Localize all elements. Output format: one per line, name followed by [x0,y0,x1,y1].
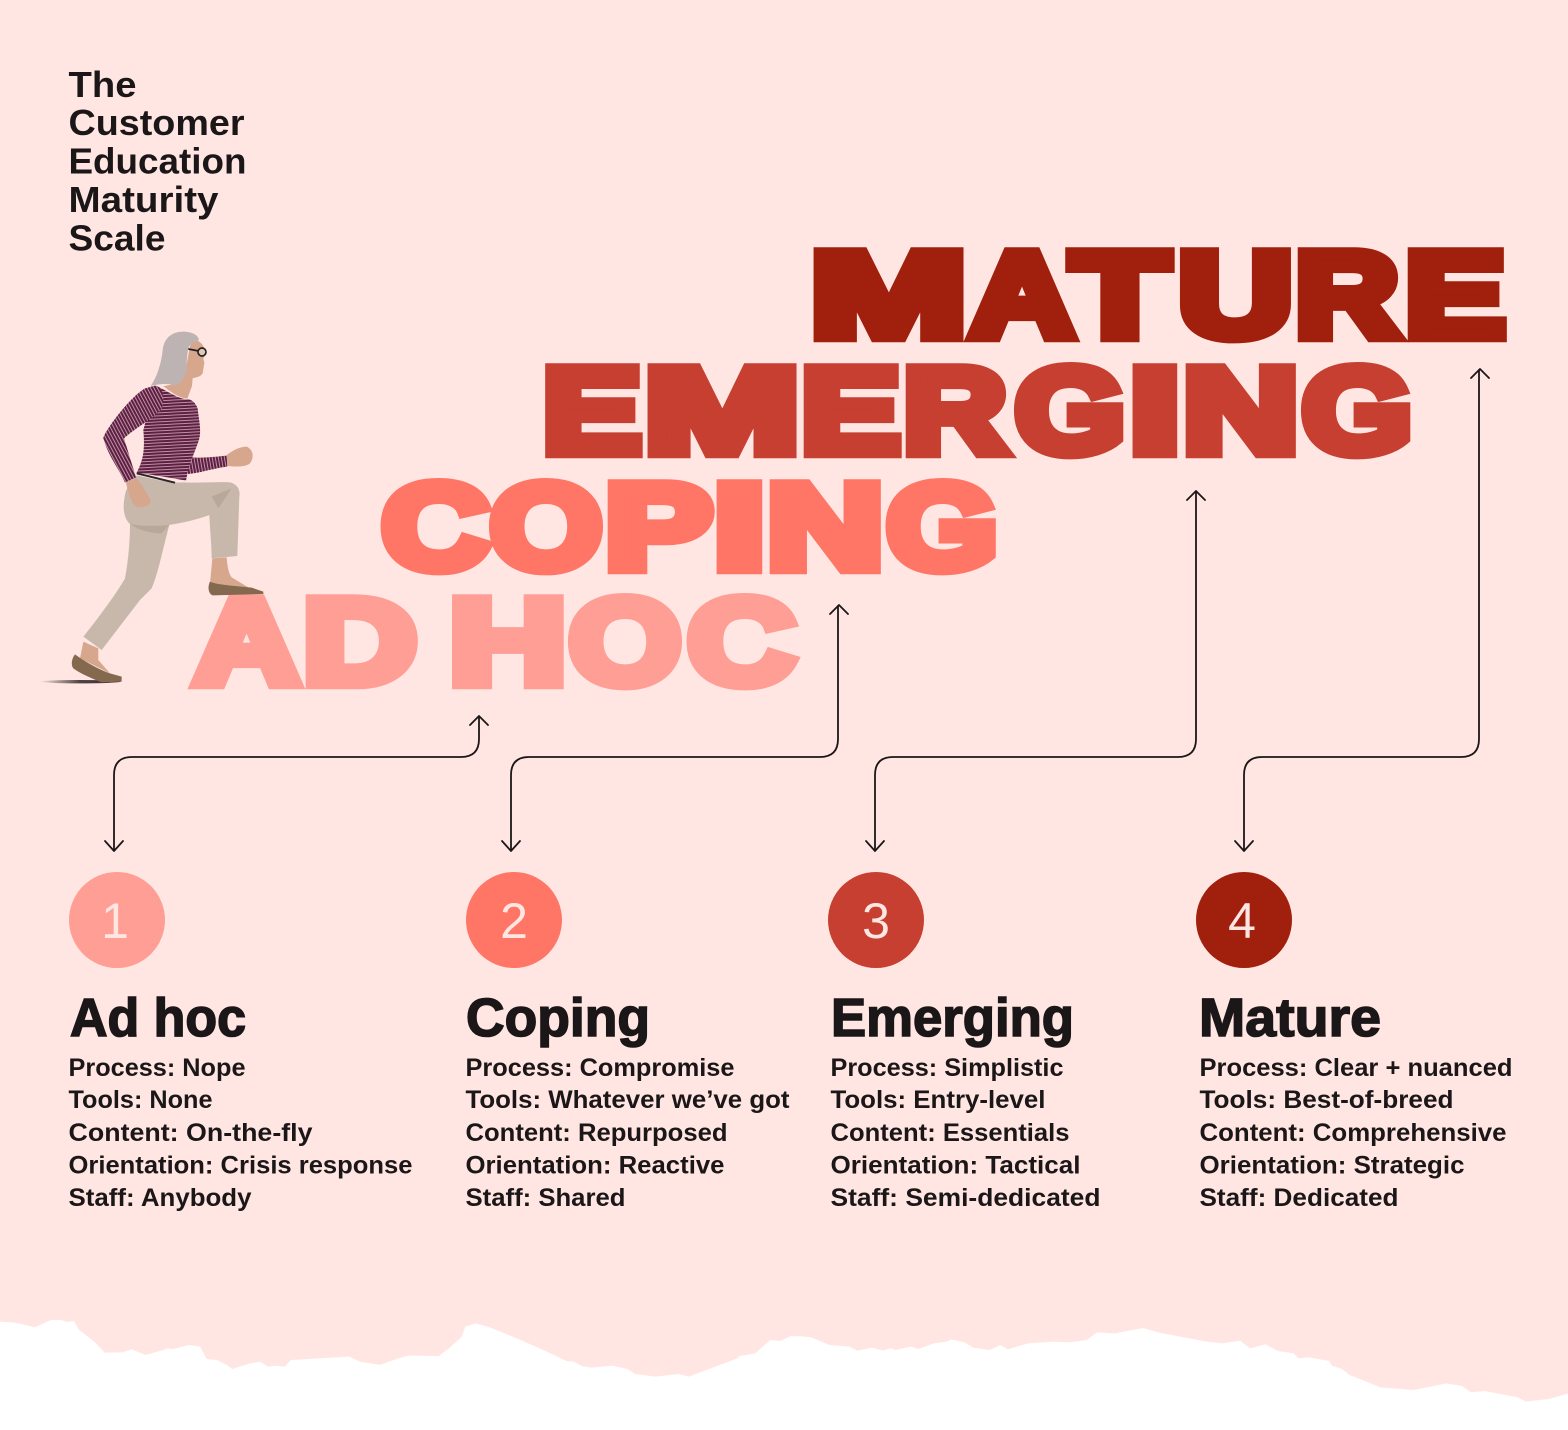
attributes Ad hoc: Orientation: Crisis response [68,1152,413,1180]
attributes Ad hoc: Staff: Anybody [68,1184,252,1212]
attributes Emerging: Process: Simplistic [830,1054,1064,1082]
title: Customer [68,102,244,143]
column: Emerging [828,872,1100,1212]
attributes Emerging: Content: Essentials [830,1119,1070,1147]
attributes Emerging: Orientation: Tactical [830,1152,1080,1180]
badge 1 [69,872,165,968]
word: Coping: C [382,460,489,594]
attributes Ad hoc [68,1054,413,1212]
word: Coping: P [605,460,712,594]
column: Mature [1196,872,1512,1212]
attributes Coping: Content: Repurposed [466,1119,728,1147]
title: Maturity [68,179,218,220]
word: Emerging: N [1183,344,1298,478]
title: Education [68,140,246,182]
word: Ad hoc: H [450,575,566,709]
torn paper edge [0,1320,1568,1430]
attributes Mature [1200,1054,1512,1212]
badge 2: 2 [500,893,528,949]
badge 3 [828,872,924,968]
attributes Coping: Process: Compromise [466,1054,735,1082]
word: Ad hoc: O [570,575,681,709]
badge 2 [466,872,562,968]
column: Ad hoc [68,872,413,1212]
attributes Mature: Tools: Best-of-breed [1200,1086,1454,1114]
word: Coping: G [887,460,997,594]
attributes Ad hoc: Process: Nope [68,1054,246,1082]
word: Emerging: I [1130,344,1180,478]
word: Emerging: E [543,344,641,478]
badge 4: 4 [1228,893,1256,949]
attributes Ad hoc: Tools: None [68,1086,213,1114]
word: Coping: O [490,460,602,594]
attributes Mature: Process: Clear + nuanced [1200,1054,1512,1082]
word: Emerging: E [802,344,900,478]
word: Mature: U [1179,228,1292,362]
attributes Coping: Staff: Shared [466,1184,626,1212]
word: Coping: N [767,460,883,594]
word: Emerging: R [904,344,1006,478]
word: Ad hoc: A [194,575,299,709]
title [68,64,246,258]
attributes Emerging: Staff: Semi-dedicated [830,1184,1100,1212]
heading Mature: Mature [1199,988,1381,1048]
arrow: Ad hoc [105,716,488,851]
title: Scale [68,218,166,258]
word: Mature: M [811,228,966,362]
word: Emerging: M [645,344,799,478]
attributes Coping [466,1054,790,1212]
attributes Ad hoc: Content: On-the-fly [68,1119,313,1147]
heading Coping: Coping [466,988,650,1048]
word: Emerging: G [1302,344,1412,478]
attributes Emerging [830,1054,1100,1212]
word: Coping: I [714,460,765,594]
word: Mature: T [1072,228,1168,362]
attributes Mature: Staff: Dedicated [1200,1184,1398,1212]
word: Mature: R [1296,228,1398,362]
badge 4 [1196,872,1292,968]
arrow: Mature [1235,369,1489,851]
word: Emerging: G [1016,344,1125,478]
attributes Mature: Content: Comprehensive [1200,1119,1507,1147]
attributes Coping: Tools: Whatever we’ve got [466,1086,790,1114]
column: Coping [466,872,790,1212]
word: Mature: A [970,228,1074,362]
word: Ad hoc: C [688,575,795,709]
arrow: Emerging [866,491,1205,851]
illustration: woman stepping up [39,332,263,683]
word: Ad hoc: D [303,575,416,709]
title: The [68,64,136,105]
attributes Mature: Orientation: Strategic [1200,1152,1465,1180]
heading Emerging: Emerging [831,988,1074,1048]
attributes Coping: Orientation: Reactive [466,1152,725,1180]
attributes Emerging: Tools: Entry-level [830,1086,1046,1114]
word: Mature: E [1406,228,1505,362]
heading Ad hoc: Ad hoc [70,988,246,1048]
badge 3: 3 [862,893,890,949]
badge 1: 1 [101,893,129,949]
arrow: Coping [502,605,848,851]
staircase of stage words [194,228,1505,709]
